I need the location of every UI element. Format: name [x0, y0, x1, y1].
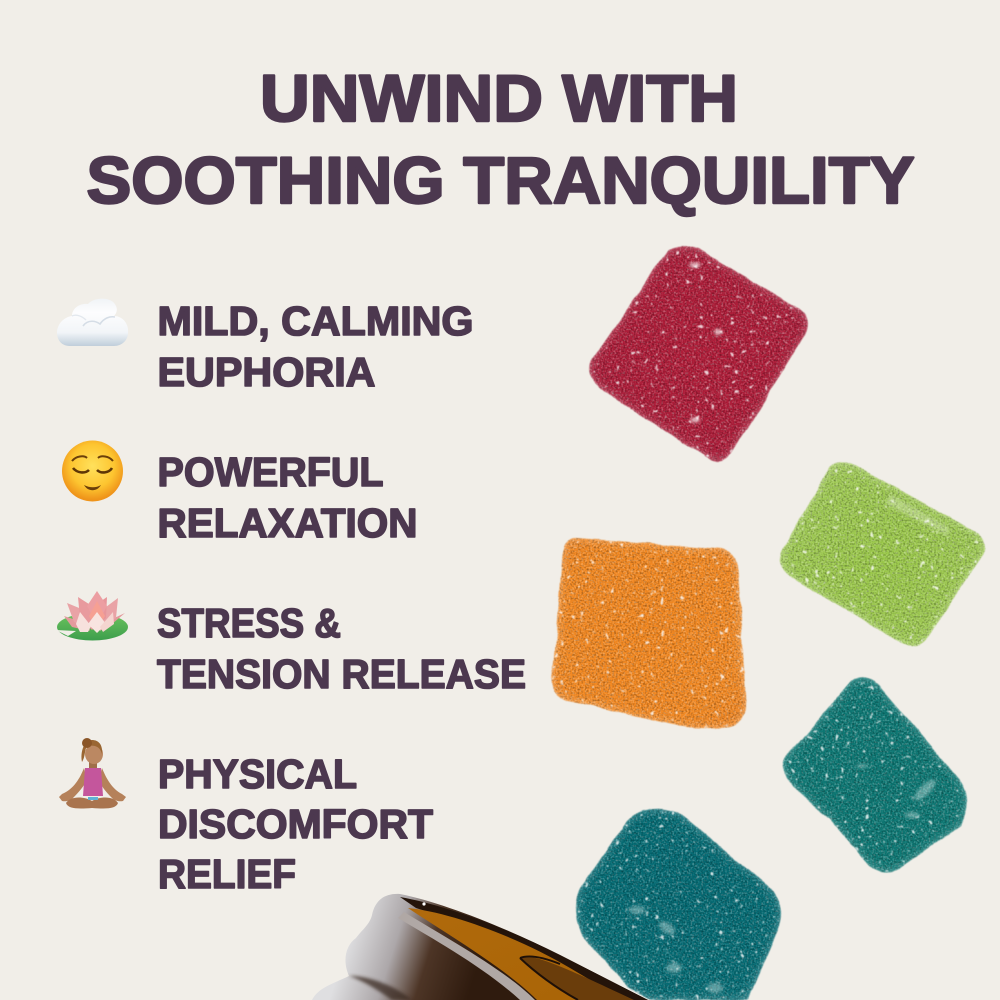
text: physical discomfort relief: DISCOMFORT	[158, 801, 433, 847]
text: powerful relaxation: RELAXATION	[158, 500, 418, 546]
gummy: red	[590, 246, 807, 461]
icon: person meditating	[59, 738, 126, 808]
title: UNWIND WITH	[260, 61, 738, 135]
text: physical discomfort relief: PHYSICAL	[158, 751, 357, 797]
gummy: teal right	[784, 678, 968, 871]
benefit: mild, calming euphoria	[57, 298, 474, 395]
icon: lotus	[56, 591, 128, 640]
text: stress and tension release	[157, 600, 526, 697]
text: physical discomfort relief	[158, 751, 433, 897]
text: powerful relaxation: POWERFUL	[158, 449, 384, 495]
text: mild, calming euphoria	[158, 298, 474, 395]
text: physical discomfort relief: RELIEF	[158, 851, 296, 897]
jar	[312, 894, 648, 1000]
benefit: physical discomfort relief	[59, 738, 433, 897]
icon: relieved face	[62, 440, 123, 502]
gummy: teal bottom	[576, 808, 781, 1000]
benefit: powerful relaxation	[62, 440, 418, 546]
text: mild, calming euphoria: MILD, CALMING	[158, 298, 474, 344]
title: SOOTHING TRANQUILITY	[86, 143, 915, 217]
benefit: stress and tension release	[56, 591, 526, 697]
text: stress and tension release: STRESS &	[157, 600, 341, 646]
text: mild, calming euphoria: EUPHORIA	[158, 349, 376, 395]
title	[86, 61, 915, 217]
text: powerful relaxation	[158, 449, 418, 546]
icon: cloud	[57, 299, 128, 346]
gummy: light green	[780, 462, 985, 645]
text: stress and tension release: TENSION RELEASE	[157, 651, 526, 697]
gummy: orange	[552, 538, 746, 728]
